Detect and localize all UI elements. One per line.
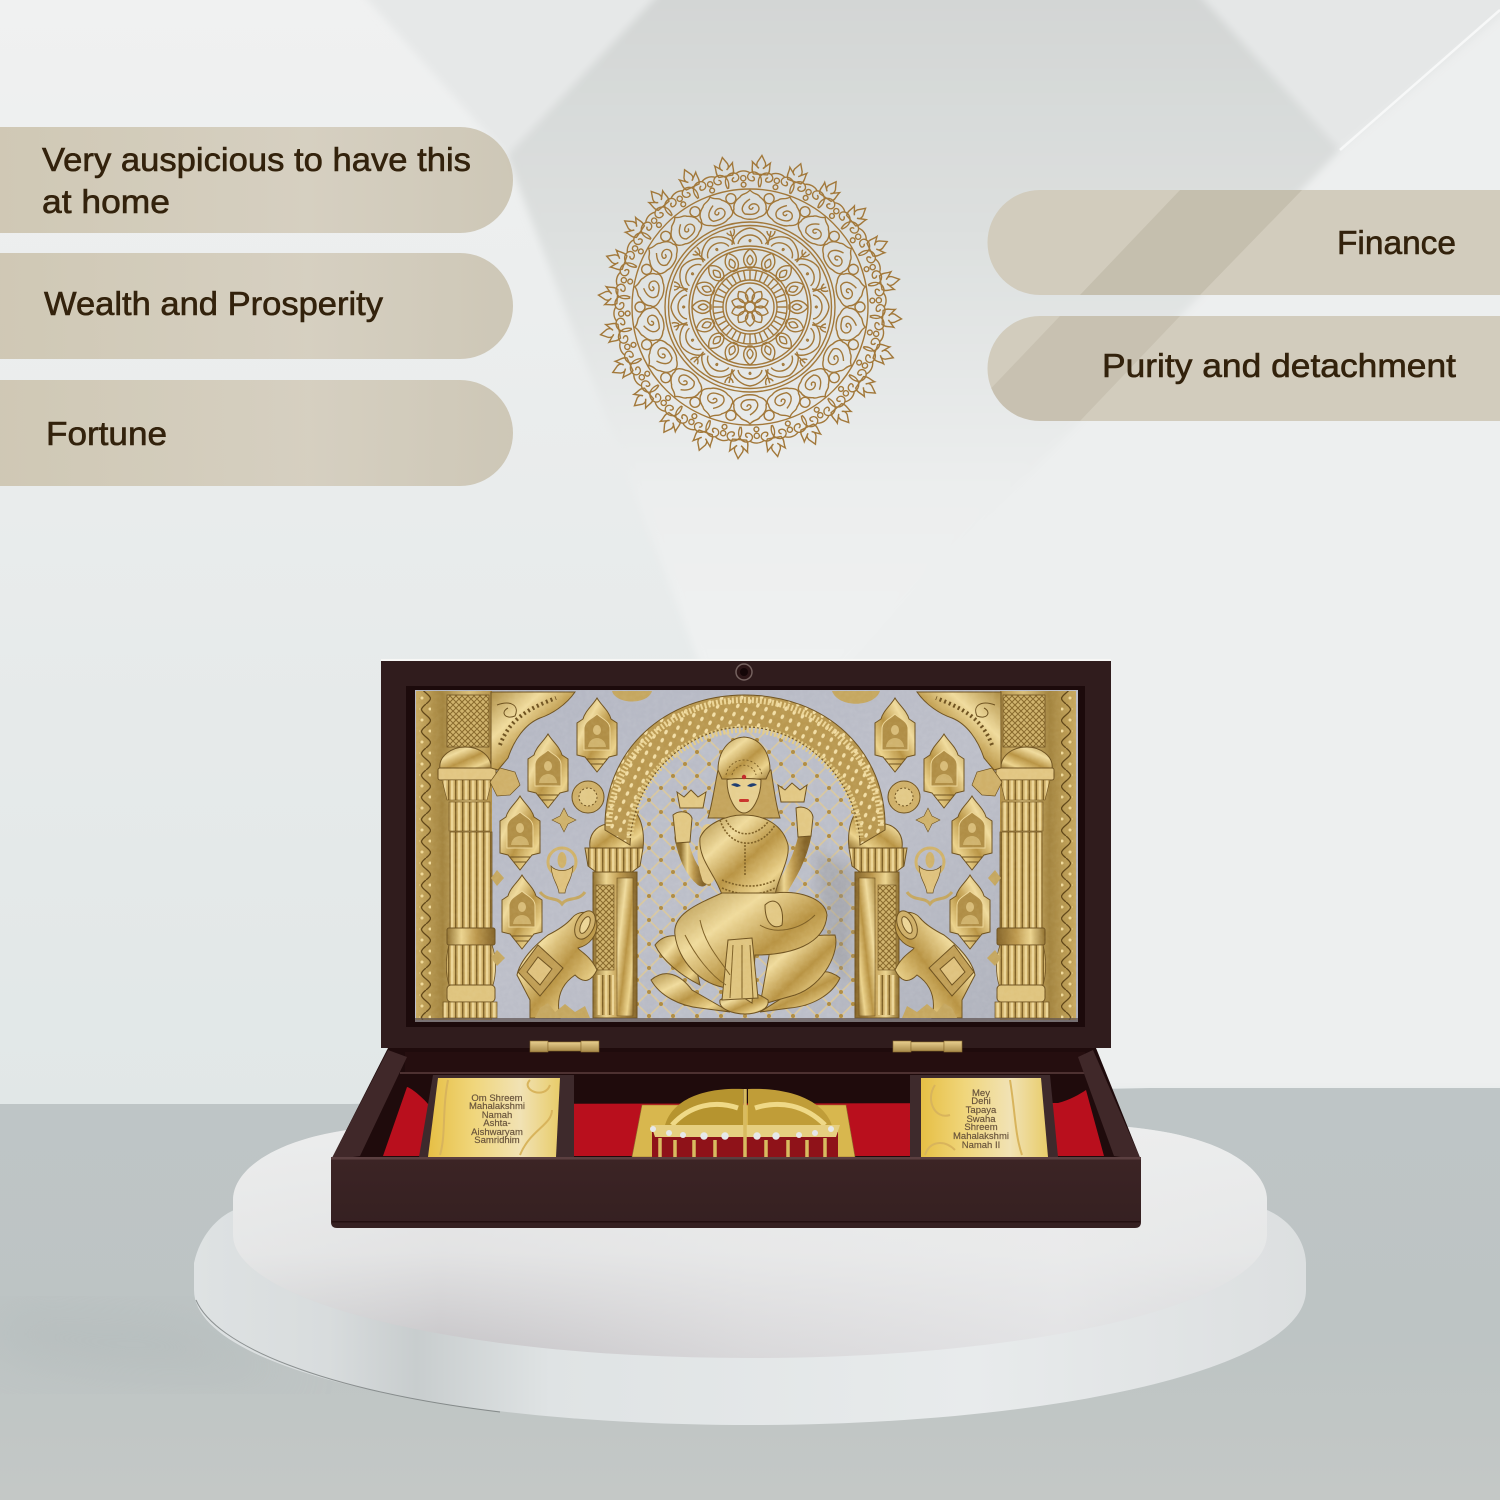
lattice backdrop	[632, 727, 858, 1020]
right mantra card: Tapaya	[966, 1105, 997, 1116]
pills right	[960, 190, 1500, 421]
left mantra card: Om Shreem	[471, 1093, 523, 1104]
box tray	[331, 1048, 1141, 1228]
plaque: Lakshmi relief	[415, 690, 1078, 1022]
background wall	[0, 0, 1500, 1110]
pill: auspicious: Very auspicious to have this	[42, 141, 471, 178]
hand on knee	[765, 901, 783, 927]
arch	[605, 695, 885, 845]
pill: wealth	[0, 253, 513, 359]
right mantra card: Swaha	[966, 1114, 996, 1125]
right mantra card: Mahalakshmi	[953, 1131, 1009, 1142]
pill: fortune	[0, 380, 513, 486]
tray sides	[331, 1050, 407, 1160]
pills left	[0, 127, 513, 486]
right mantra card: Dehi	[971, 1096, 991, 1107]
box lid	[381, 659, 1111, 1048]
drape	[722, 938, 758, 1000]
glass edge	[415, 1018, 1078, 1022]
lotus base	[651, 935, 840, 1014]
pill: purity: Purity and detachment	[1102, 347, 1456, 384]
hair	[708, 770, 780, 818]
metal texture	[415, 690, 1078, 1022]
mottled patch	[815, 850, 856, 985]
right mantra card	[910, 1075, 1058, 1157]
left mantra card	[419, 1075, 574, 1157]
pill: fortune: Fortune	[46, 415, 167, 452]
floor	[0, 1088, 1500, 1500]
icon: mandala	[587, 144, 913, 470]
legs	[675, 892, 827, 1003]
left mantra card: Aishwaryam	[471, 1127, 523, 1138]
pill: purity	[960, 316, 1500, 421]
goddess figure	[651, 737, 840, 1014]
pill: finance	[988, 190, 1500, 295]
back wall	[405, 1052, 1085, 1072]
right mantra card: Namah II	[962, 1140, 1000, 1151]
pill: finance: Finance	[1337, 224, 1456, 261]
left mantra card: Samridhim	[474, 1135, 520, 1146]
left side ornaments	[416, 691, 643, 1020]
pooja box	[331, 659, 1141, 1228]
podium	[194, 1125, 1306, 1425]
arms	[681, 835, 805, 900]
pill: auspicious	[0, 127, 513, 233]
pill: auspicious: at home	[42, 183, 170, 220]
right mantra card: Shreem	[964, 1122, 998, 1133]
left mantra card: Namah	[482, 1110, 512, 1121]
tray front	[331, 1158, 1141, 1228]
left mantra card: Ashta-	[483, 1118, 511, 1129]
crown	[718, 737, 770, 779]
right mantra card: Mey	[972, 1088, 990, 1099]
hinges	[530, 1041, 962, 1052]
torso	[700, 815, 788, 895]
upper tier	[233, 1125, 1267, 1358]
top corner rosettes	[612, 691, 880, 704]
hands and lotuses	[673, 783, 813, 843]
right side ornaments	[849, 691, 1076, 1020]
pill: wealth: Wealth and Prosperity	[44, 285, 384, 322]
golden feet	[632, 1089, 855, 1157]
eyes and marks	[731, 775, 757, 802]
necklace and belt	[720, 820, 775, 894]
face	[727, 778, 761, 813]
red velvet lining	[383, 1087, 1104, 1156]
lower tier	[194, 1210, 1306, 1425]
left mantra card: Mahalakshmi	[469, 1101, 525, 1112]
